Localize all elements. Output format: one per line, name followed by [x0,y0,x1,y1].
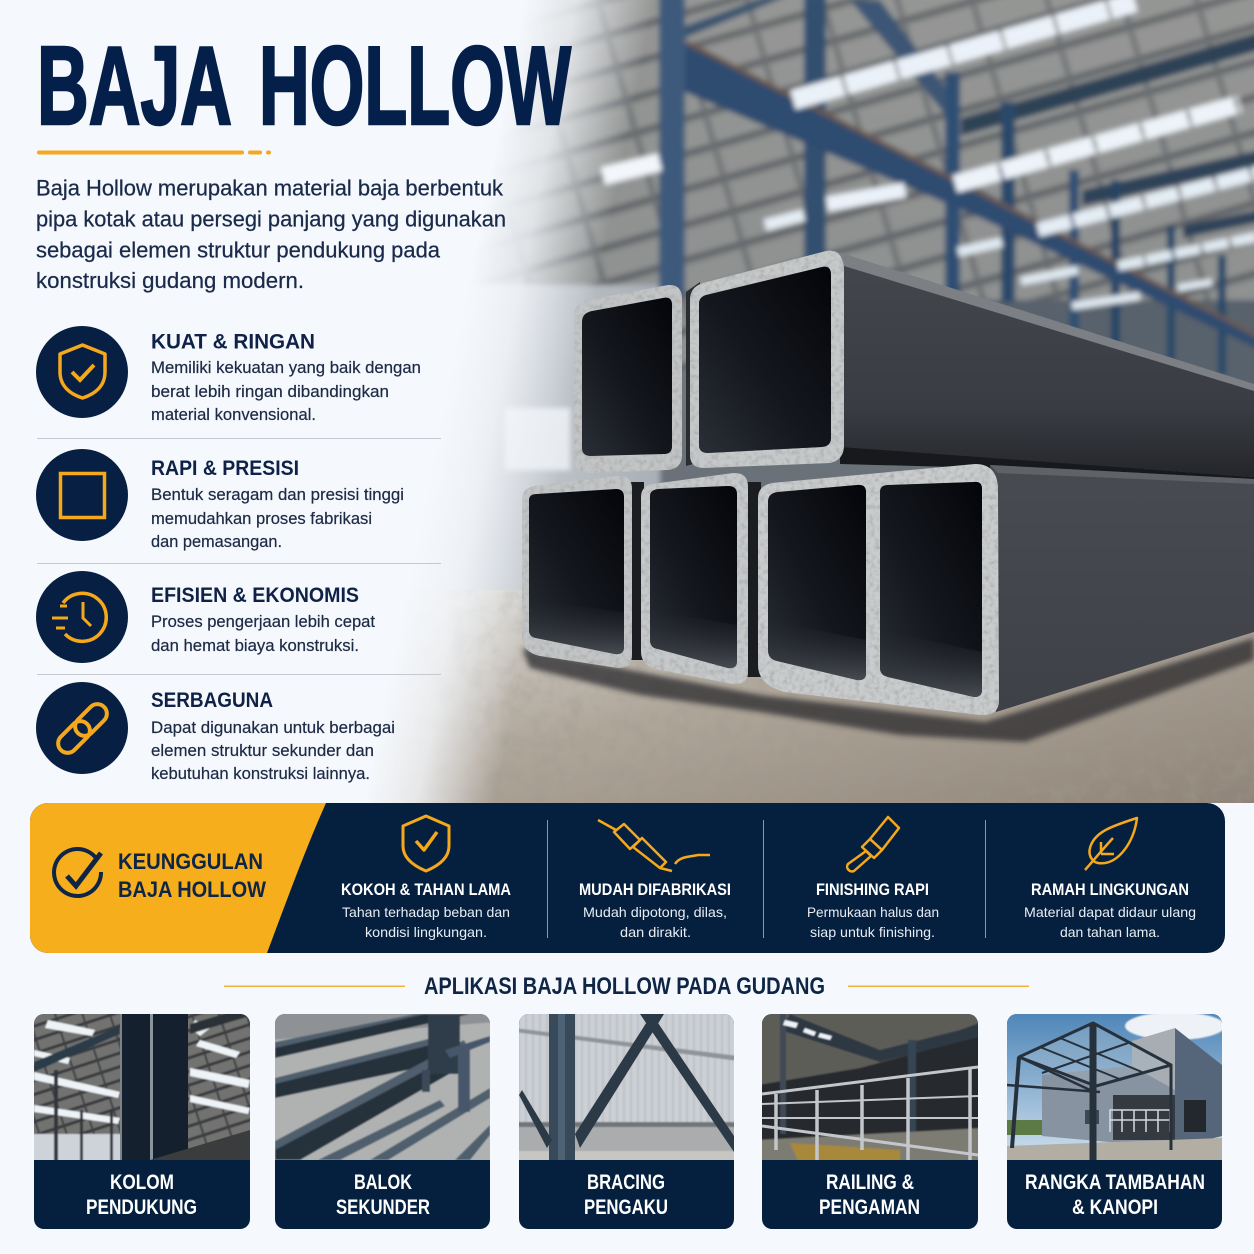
title accent rule [37,150,271,154]
feature: rapi & presisi: Bentuk seragam dan presisi tinggi [151,486,404,504]
warehouse ceiling background [360,0,1254,680]
feature: serbaguna [36,682,395,783]
card: balok sekunder: BALOK [354,1171,412,1194]
steel tube stack [522,250,1254,715]
icon: square in circle [36,449,128,541]
top tubes [574,250,1254,482]
icon: welding torch [598,820,710,871]
icon: shield in circle [36,326,128,418]
icon: brush [847,817,899,871]
benefit: kokoh & tahan lama: kondisi lingkungan. [365,924,487,940]
benefit: ramah lingkungan [1024,818,1196,940]
card: railing & pengaman: RAILING & [826,1171,914,1194]
card: kolom pendukung [30,1006,254,1229]
icon: chain link in circle [36,682,128,774]
intro paragraph: pipa kotak atau persegi panjang yang digunakan [36,206,506,232]
feature: rapi & presisi: memudahkan proses fabrikasi [151,510,372,528]
feature: efisien & ekonomis: Proses pengerjaan lebih cepat [151,613,375,631]
card: bracing pengaku: PENGAKU [584,1196,668,1219]
title: HOLLOW [259,24,571,148]
photo: column [34,1014,250,1160]
concrete floor [360,590,1254,803]
feature: serbaguna: kebutuhan konstruksi lainnya. [151,765,370,783]
icon: leaf [1085,818,1137,870]
feature: serbaguna: elemen struktur sekunder dan [151,742,374,760]
title: BAJA [37,24,232,148]
feature: serbaguna: SERBAGUNA [151,689,273,712]
benefit: mudah difabrikasi: dan dirakit. [620,924,691,940]
title [37,24,571,148]
section heading: aplikasi: APLIKASI BAJA HOLLOW PADA GUDANG [424,973,825,1000]
intro paragraph: sebagai elemen struktur pendukung pada [36,238,441,262]
benefit: ramah lingkungan: RAMAH LINGKUNGAN [1031,881,1189,899]
benefit: finishing rapi: siap untuk finishing. [810,924,935,940]
card: rangka tambahan & kanopi: & KANOPI [1072,1196,1158,1219]
yellow label block [30,803,326,953]
card: bracing pengaku [515,1010,738,1229]
feature: kuat & ringan [36,326,421,424]
hero photo: warehouse with stacked hollow steel tubes [0,0,1254,803]
card: railing & pengaman [758,1010,982,1229]
panel: keunggulan baja hollow [30,803,1225,953]
intro paragraph: konstruksi gudang modern. [36,268,304,293]
card: balok sekunder: SEKUNDER [336,1196,430,1219]
benefit: finishing rapi [807,817,939,940]
benefit: finishing rapi: Permukaan halus dan [807,904,939,920]
photo: railing [758,1010,982,1165]
feature: kuat & ringan: KUAT & RINGAN [151,330,315,354]
benefit: kokoh & tahan lama: KOKOH & TAHAN LAMA [341,881,511,899]
benefit: ramah lingkungan: Material dapat didaur ulang [1024,904,1196,920]
benefit: mudah difabrikasi: Mudah dipotong, dilas, [583,904,727,920]
card: balok sekunder [270,1010,495,1229]
benefit: mudah difabrikasi: MUDAH DIFABRIKASI [579,881,731,899]
feature: rapi & presisi [36,449,404,551]
yellow label block: BAJA HOLLOW [118,877,266,902]
feature: efisien & ekonomis: EFISIEN & EKONOMIS [151,584,359,607]
feature: efisien & ekonomis: dan hemat biaya konstruksi. [151,637,359,655]
feature: rapi & presisi: dan pemasangan. [151,533,282,551]
card: bracing pengaku: BRACING [587,1171,665,1194]
photo: canopy frame [1007,1012,1225,1160]
feature: kuat & ringan: berat lebih ringan dibandingkan [151,383,389,401]
feature: rapi & presisi: RAPI & PRESISI [151,457,299,480]
card: kolom pendukung: PENDUKUNG [86,1196,197,1219]
icon: circled check [54,849,101,896]
benefit: kokoh & tahan lama: Tahan terhadap beban dan [342,904,510,920]
feature: serbaguna: Dapat digunakan untuk berbagai [151,719,395,737]
card: kolom pendukung: KOLOM [110,1171,174,1194]
left fade of the hero photo [0,0,720,803]
feature: efisien & ekonomis [36,571,375,663]
icon: shield [403,816,449,871]
feature: kuat & ringan: material konvensional. [151,406,316,424]
card: rangka tambahan & kanopi: RANGKA TAMBAHAN [1025,1171,1205,1194]
intro paragraph: Baja Hollow merupakan material baja berbentuk [36,176,504,200]
benefit: ramah lingkungan: dan tahan lama. [1060,924,1160,940]
feature: kuat & ringan: Memiliki kekuatan yang baik dengan [151,359,421,377]
intro paragraph [36,176,506,293]
benefit: mudah difabrikasi [579,820,731,940]
bottom tubes [522,464,1254,715]
card: railing & pengaman: PENGAMAN [819,1196,920,1219]
benefit: finishing rapi: FINISHING RAPI [816,881,929,899]
photo: secondary beams [270,1010,495,1165]
icon: clock in circle [36,571,128,663]
card: rangka tambahan & kanopi [1007,1012,1225,1229]
photo: bracing [515,1010,738,1165]
benefit: kokoh & tahan lama [341,816,511,940]
yellow label block: KEUNGGULAN [118,849,263,874]
